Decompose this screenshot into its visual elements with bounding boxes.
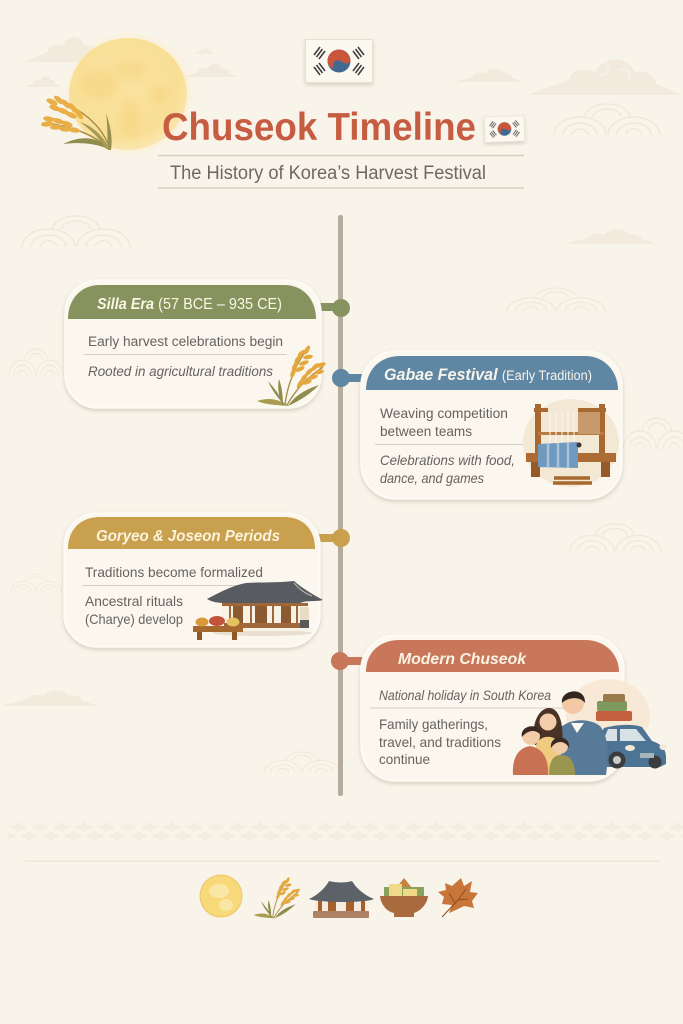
text: Goryeo bullets: Traditions become formalized [85,564,263,580]
panel: Goryeo and Joseon [64,514,350,646]
header: Modern: Modern Chuseok [398,651,527,668]
subtitle: The History of Korea’s Harvest Festival [170,163,486,184]
text: Gabae bullets: Celebrations with food, [380,452,515,468]
icon: small Korean flag [484,116,525,142]
header: Silla Era [68,285,316,319]
icon: footer rice [254,877,301,918]
boy [513,726,548,775]
connector: Silla Era [316,299,350,317]
header: Gabae [366,356,618,390]
panel: Silla Era [66,280,350,408]
girl [549,738,575,775]
icon: footer food bowl [380,878,428,917]
panel: Modern Chuseok [331,636,666,780]
text: Silla bullets [84,334,287,379]
icon: footer hanok [309,881,374,918]
icon: rice sheaf by moon [41,94,112,150]
header: Modern [366,640,619,672]
text: Modern bullets [370,688,565,767]
panel: Gabae Festival [332,352,622,498]
title: Chuseok Timeline [162,106,476,149]
text: Goryeo bullets: (Charye) develop [85,611,183,627]
text: Silla bullets: Rooted in agricultural traditions [88,364,273,379]
text: Gabae bullets: between teams [380,423,472,439]
icon: hanok and offering table [193,581,323,640]
header: Goryeo [68,517,315,549]
text: Gabae bullets [375,405,530,486]
text: Gabae bullets: Weaving competition [380,405,508,421]
decorative cloud band [8,822,683,841]
car [596,725,666,768]
connector: Gabae [332,369,369,387]
luggage [596,694,632,721]
text: Modern bullets: Family gatherings, [379,716,488,732]
father [560,691,608,775]
header: Goryeo: Goryeo & Joseon Periods [96,528,280,545]
text: Goryeo bullets [82,564,290,627]
connector: Modern [331,652,369,670]
timeline line [338,215,343,796]
text: Silla bullets: Early harvest celebrations begin [88,334,283,349]
text: Modern bullets: National holiday in South Korea [379,688,551,703]
moon [69,37,188,151]
icon: footer moon [200,875,242,917]
mother [534,708,562,775]
subtitle [158,156,524,188]
text: Gabae bullets: dance, and games [380,470,484,486]
icon: rice in card [257,345,326,406]
background clouds and wave patterns [0,37,683,772]
icon: weaving loom [523,399,619,487]
text: Modern bullets: travel, and traditions [379,734,501,750]
footer divider [25,860,659,862]
icon: Korean flag top [306,40,372,82]
connector: Goryeo [316,529,350,547]
header: Gabae: Gabae Festival (Early Tradition) [384,365,592,384]
icon: family and car [513,679,666,775]
footer icons [200,875,478,918]
text: Goryeo bullets: Ancestral rituals [85,593,183,609]
header: Silla Era: Silla Era (57 BCE – 935 CE) [97,296,282,313]
text: Modern bullets: continue [379,751,430,767]
icon: footer maple leaf [438,878,478,917]
